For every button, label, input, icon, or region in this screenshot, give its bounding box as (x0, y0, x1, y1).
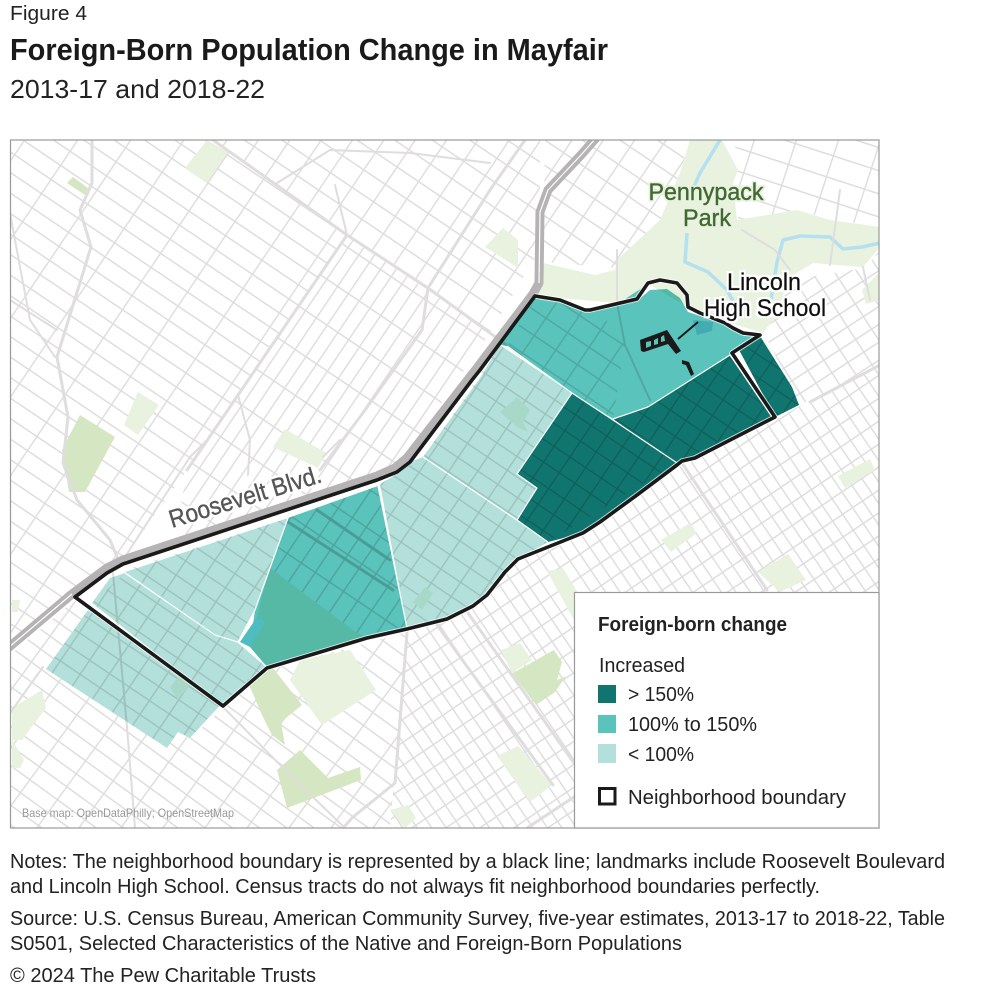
label: Pennypack Park (648, 180, 766, 226)
legend item: neighborhood boundary: Neighborhood boundary (628, 787, 846, 809)
map border (10, 140, 879, 828)
map panel (8, 138, 880, 828)
figure label: Figure 4 (10, 3, 87, 25)
small pond (693, 320, 713, 335)
legend item: over 150% (598, 684, 694, 706)
source (10, 908, 945, 955)
tract: northeast, over 150% (613, 355, 772, 464)
census tracts (46, 288, 799, 748)
subtitle: 2013-17 and 2018-22 (10, 74, 265, 104)
label: Lincoln High School: Lincoln (727, 269, 801, 296)
notes (10, 851, 945, 898)
street grid (10, 140, 880, 828)
tract: central east, under 100% (380, 457, 548, 628)
tract borders (125, 346, 772, 667)
legend item: under 100% (598, 744, 694, 766)
parks (12, 140, 880, 828)
title: Foreign-Born Population Change in Mayfair (10, 32, 608, 67)
notes: Notes: The neighborhood boundary is represented by a black line; landmarks include Roosevelt Boulevard (10, 851, 945, 873)
label: Lincoln High School: High School (704, 295, 826, 322)
tract: boulevard west, under 100% (125, 518, 288, 642)
tract sliver west (240, 617, 265, 647)
tract park tints (170, 397, 530, 700)
river (685, 140, 880, 305)
tract: center, over 150% (517, 393, 677, 542)
legend item: over 150%: > 150% (628, 684, 694, 706)
leader line (678, 322, 698, 339)
label: Pennypack Park: Pennypack (648, 179, 764, 206)
tract: Lincoln area, 100 to 150% (500, 289, 758, 419)
copyright: © 2024 The Pew Charitable Trusts (10, 965, 316, 987)
icon: Lincoln High School building (640, 330, 694, 376)
tract sliver (625, 288, 642, 299)
label: Roosevelt Blvd.: Roosevelt Blvd. (166, 461, 325, 534)
source: S0501, Selected Characteristics of the Native and Foreign-Born Populations (10, 933, 682, 955)
tract: boundary southwest, under 100% (92, 573, 267, 706)
source: Source: U.S. Census Bureau, American Community Survey, five-year estimates, 2013-17 to 2018-22, Table (10, 908, 945, 930)
base map credit: Base map: OpenDataPhilly; OpenStreetMap (22, 806, 234, 820)
notes: and Lincoln High School. Census tracts do not always fit neighborhood boundaries perfectly. (10, 876, 820, 898)
neighborhood boundary (75, 280, 775, 706)
road: Roosevelt Boulevard (8, 138, 596, 648)
legend (574, 592, 879, 828)
legend item: under 100%: < 100% (628, 744, 694, 766)
label: Lincoln High School (704, 269, 826, 322)
tract: lower left, under 100% (46, 610, 223, 748)
tract overlay: park tint (250, 568, 367, 666)
tract: north central, under 100% (423, 345, 572, 520)
label: Pennypack Park: Park (683, 205, 732, 232)
tract: central, 100 to 150% (250, 486, 407, 667)
legend subheading: Increased (599, 655, 685, 677)
legend title: Foreign-born change (598, 614, 787, 636)
major roads (10, 140, 880, 828)
tract: far east, over 150% (738, 336, 799, 417)
legend item: 100% to 150%: 100% to 150% (628, 714, 757, 736)
